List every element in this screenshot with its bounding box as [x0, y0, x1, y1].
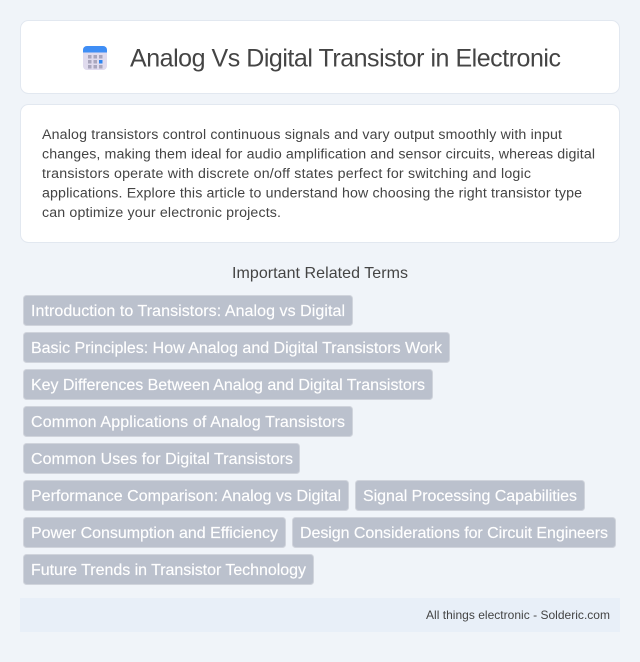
intro paragraph: applications. Explore this article to understand how choosing the right transistor type: [42, 186, 582, 202]
tag: analog applications: Common Applications of Analog Transistors: [31, 414, 345, 431]
tag: design considerations: Design Considerations for Circuit Engineers: [300, 525, 608, 542]
tag: signal processing: [356, 480, 584, 510]
tag list: [24, 296, 616, 584]
tag: performance comparison: [24, 480, 348, 510]
tag: digital uses: [24, 444, 300, 474]
footer: [20, 598, 620, 632]
panel: title: [20, 20, 620, 94]
heading: related terms: Important Related Terms: [232, 265, 408, 282]
tag: digital uses: Common Uses for Digital Transistors: [31, 451, 293, 468]
tag: key differences: Key Differences Between Analog and Digital Transistors: [31, 377, 425, 394]
tag: introduction: [24, 296, 352, 326]
tag: signal processing: Signal Processing Capabilities: [363, 488, 577, 505]
title text: Analog Vs Digital Transistor in Electronic: [130, 44, 561, 72]
tag: future trends: [24, 554, 314, 584]
tag: design considerations: [292, 518, 616, 548]
tag: future trends: Future Trends in Transistor Technology: [31, 562, 306, 579]
footer text: All things electronic - Solderic.com: [426, 608, 610, 622]
tag: basic principles: [24, 332, 450, 362]
intro paragraph: transistors operate with discrete on/off states perfect for switching and logic: [42, 166, 531, 182]
intro paragraph: [42, 127, 595, 221]
panel: introduction: [20, 104, 620, 242]
tag: key differences: [24, 370, 432, 400]
icon: calendar grid: [83, 46, 107, 70]
tag: power consumption: [24, 518, 286, 548]
intro paragraph: changes, making them ideal for audio amplification and sensor circuits, whereas digital: [42, 146, 595, 162]
tag: basic principles: Basic Principles: How Analog and Digital Transistors Work: [31, 340, 443, 357]
intro paragraph: Analog transistors control continuous signals and vary output smoothly with input: [42, 127, 562, 143]
tag: analog applications: [24, 406, 352, 436]
tag: power consumption: Power Consumption and Efficiency: [31, 525, 278, 542]
tag: performance comparison: Performance Comparison: Analog vs Digital: [31, 488, 341, 505]
tag: introduction: Introduction to Transistors: Analog vs Digital: [31, 303, 345, 320]
intro paragraph: can optimize your electronic projects.: [42, 205, 281, 221]
